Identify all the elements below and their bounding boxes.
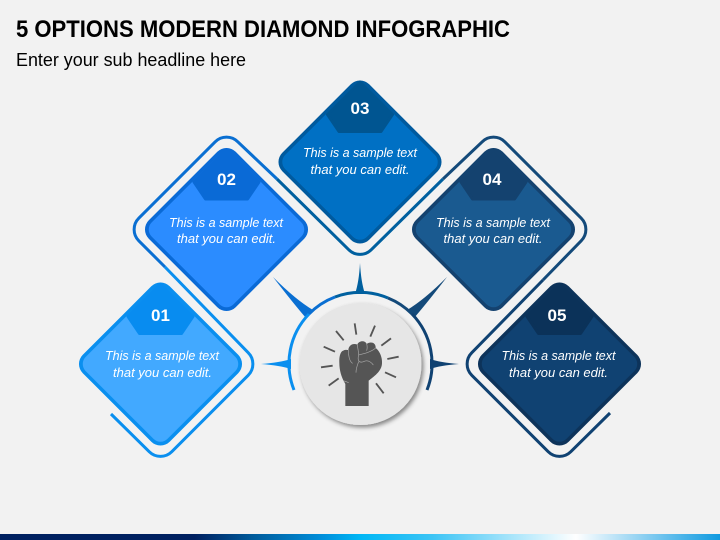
icon: raised fist — [321, 323, 399, 406]
outline ring: option 01 — [111, 267, 253, 456]
diamond: option 02 — [145, 148, 308, 311]
diamond: option 03: This is a sample text — [303, 145, 417, 160]
subtitle: Enter your sub headline here — [16, 50, 246, 70]
diamond: option 01: 01 — [151, 306, 170, 325]
outline ring: option 04 — [443, 137, 586, 280]
outline ring: option 02 — [134, 137, 277, 267]
diamond: option 04: 04 — [483, 170, 502, 189]
diamond: option 01 — [79, 282, 242, 446]
diamond: option 03 — [278, 80, 442, 244]
spike: upper right — [407, 277, 447, 318]
outline ring: option 03 — [277, 179, 443, 254]
diamond: option 05 — [478, 282, 641, 446]
diamond: option 05: This is a sample text — [502, 348, 616, 363]
spike: left — [261, 359, 291, 369]
diamond: option 02: This is a sample text — [169, 215, 283, 230]
diamond: option 02: 02 — [217, 170, 236, 189]
diamond: option 01: This is a sample text — [105, 348, 219, 363]
diamond: option 03: that you can edit. — [310, 162, 409, 177]
outline ring: option 05 — [467, 280, 610, 456]
spike: right — [430, 359, 459, 369]
diamond: option 01: that you can edit. — [113, 365, 212, 380]
segmented arc around centre — [289, 292, 432, 390]
diamond: option 02: that you can edit. — [177, 231, 276, 246]
diamond: option 04: This is a sample text — [436, 215, 550, 230]
spike: top — [355, 263, 365, 294]
diamond: option 05: 05 — [548, 306, 566, 325]
title: 5 OPTIONS MODERN DIAMOND INFOGRAPHIC — [16, 16, 510, 43]
diamond: option 03: 03 — [351, 99, 369, 118]
bottom gradient bar — [0, 534, 720, 540]
spike: upper left — [273, 277, 313, 318]
diamond: option 05: that you can edit. — [509, 365, 608, 380]
diamond: option 04: that you can edit. — [444, 231, 542, 246]
diamond: option 04 — [412, 148, 575, 311]
centre circle — [300, 303, 422, 425]
